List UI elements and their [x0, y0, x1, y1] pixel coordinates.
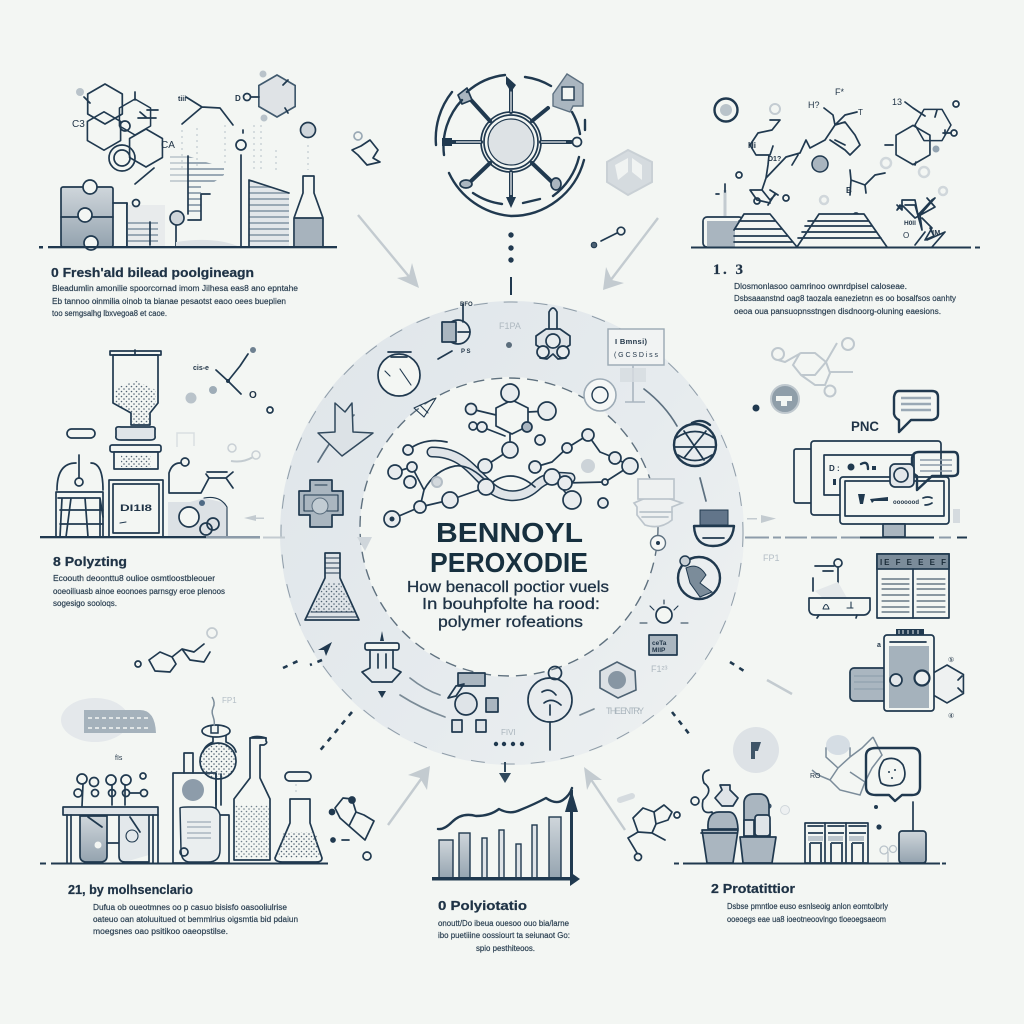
icon: display unit: DI1I8 — [120, 503, 152, 514]
icon: top molecule: cis-e — [193, 365, 209, 372]
dot — [752, 404, 760, 412]
speech bubble: lower — [890, 452, 958, 490]
icon: ring nodes — [76, 88, 135, 171]
ring icon: disc — [584, 379, 616, 411]
ring icon: molecule flower — [536, 308, 570, 359]
outer dashed ring — [281, 302, 743, 764]
ring label: faint caption: THE ENTRY — [606, 706, 644, 716]
icon: faint sprout — [880, 846, 896, 862]
ring icon: sign board — [608, 329, 664, 402]
step description: spio pesthiteoos. — [476, 944, 535, 953]
icon: cabinet with flask — [173, 753, 229, 863]
icon: P disc — [733, 727, 779, 773]
icon: rounded grid machine — [56, 455, 103, 537]
icon: trapezoid layers — [734, 214, 887, 247]
icon: tray with pin — [809, 559, 870, 618]
arrow: bottom-right to ring — [584, 767, 625, 830]
panel: middle-left step — [40, 347, 285, 608]
step description: ooeoiliuasb ainoe eoonoes parnsgy eroe plenoos — [53, 587, 225, 596]
faint capsule — [620, 796, 632, 800]
ring icon: sign board: (GCSDiss — [614, 352, 658, 359]
central ring panel — [280, 301, 744, 765]
label: RO — [810, 773, 821, 780]
left arrow — [244, 515, 264, 521]
wheel house badge — [553, 74, 583, 112]
panel: bottom-center chart — [432, 762, 580, 953]
icon: right hexagon: D — [235, 94, 241, 103]
molecule atoms — [384, 384, 638, 527]
icon: hexagon molecule — [84, 84, 162, 184]
ring icon: globe — [678, 556, 720, 599]
ring icon: chevron arrow — [318, 403, 373, 456]
ring icon: small spark — [414, 398, 436, 417]
icon: device panel: ④ — [948, 712, 954, 720]
icon: three frame rack — [805, 823, 868, 863]
icon: capsule — [67, 429, 95, 438]
step heading: 0 Fresh'ald bilead poolgineagn — [51, 265, 254, 280]
subtitle — [407, 579, 609, 631]
dashed connector: bottom-left — [318, 712, 352, 753]
dashed divider — [745, 536, 967, 538]
icon: small hex molecule bottom — [628, 805, 680, 860]
connector dots — [508, 232, 514, 295]
dot — [766, 803, 772, 809]
ring icon: bowl — [694, 510, 734, 546]
polymer ribbon — [432, 452, 570, 496]
ring label: faint code: FIVI — [501, 728, 516, 737]
atoms — [736, 172, 859, 219]
ring dot — [506, 342, 512, 348]
step description — [93, 903, 298, 936]
arrow: top right to ring — [603, 218, 658, 290]
step heading: 1. 3 — [713, 262, 743, 278]
icon: front monitor — [840, 477, 949, 537]
label: fIs — [115, 755, 123, 762]
icon: small branched chain: B — [846, 186, 852, 195]
faint atoms — [820, 158, 947, 204]
main title — [430, 517, 588, 578]
icon: lab bench — [63, 807, 158, 863]
wheel end caps — [442, 76, 582, 208]
ring dots — [494, 742, 524, 746]
icon: molecule chain: T — [858, 108, 863, 117]
icon: table sheet — [877, 554, 949, 618]
ring icon: leaf badge — [600, 662, 636, 698]
step description: oateuo oan atoluuitued ot bemmlrius oigsmtia bid pdaiun — [93, 915, 298, 924]
ring icon: sun box: MllP — [652, 647, 666, 654]
icon: reactor with bubbles — [168, 497, 228, 537]
icon: target disc — [714, 98, 780, 122]
wheel hub — [481, 112, 541, 172]
wheel arcs — [443, 75, 580, 204]
speech bubble: upper — [894, 391, 938, 432]
step description — [727, 902, 888, 924]
molecule labels: C3 — [72, 119, 85, 130]
icon: back monitor: D : — [829, 464, 840, 473]
step description: too semgsalhg lbxvegoa8 et caoe. — [52, 309, 167, 318]
icon: erlenmeyer flask — [275, 784, 322, 862]
step description: sogesigo sooloqs. — [53, 599, 117, 608]
step description: Eb tannoo oinmilia oinob ta bianae pesaotst eaoo oees bueplien — [52, 297, 286, 306]
baseline dot — [39, 246, 43, 248]
icon: molecule chain — [748, 87, 863, 205]
molecule bonds — [392, 393, 630, 519]
horizontal axis — [432, 872, 580, 886]
ring icon: striped round seal — [674, 421, 716, 466]
icon: back monitor — [794, 441, 941, 515]
icon: small hex molecule — [330, 797, 374, 860]
icon: badge disc — [771, 385, 799, 413]
icon: hourglass column — [110, 350, 161, 469]
ring icon: plus shield — [299, 480, 343, 527]
step heading: 0 Polyiotatio — [438, 898, 527, 913]
subtitle: In bouhpfolte ha rood: — [422, 596, 600, 613]
icon: device panel: ⑤ — [948, 656, 954, 664]
dashed connector: right — [730, 662, 744, 671]
subtitle: polymer rofeations — [438, 614, 583, 631]
main title: PEROXODIE — [430, 547, 588, 578]
ring icon: small ring — [650, 536, 666, 550]
speech bubble: leaf — [866, 748, 920, 801]
step heading: 8 Polyzting — [53, 554, 127, 569]
end dot — [942, 862, 946, 864]
panel: top-left step — [39, 70, 337, 318]
baseline — [683, 862, 940, 864]
step description: Dsbsaaanstnd oag8 taozala eanezietnn es oo bosalfsos oanhty — [734, 294, 956, 303]
grey atom — [932, 146, 940, 152]
icon: canister — [899, 802, 926, 863]
icon: molecule chain: H? — [808, 100, 820, 110]
step description — [53, 574, 225, 608]
icon: top molecule — [186, 347, 273, 413]
ring icon: sun box — [640, 600, 688, 655]
faint node — [953, 509, 960, 523]
blurred glow — [826, 735, 850, 755]
icon: branched chain — [178, 96, 233, 170]
icon: device panel: a — [877, 642, 881, 649]
ring small arrow — [318, 642, 332, 656]
molecule labels: CA — [161, 140, 175, 151]
panel: bottom-right step — [674, 727, 946, 924]
dashed connector: bottom-right — [672, 712, 690, 735]
icon: molecule chain: D1? — [768, 156, 781, 163]
subtitle: How benacoll poctior vuels — [407, 579, 609, 596]
step description: oeoa oua pansuopnsstngen disdnoorg-oluning eaesions. — [734, 307, 941, 316]
small molecule — [591, 227, 625, 248]
step heading: 2 Protatittior — [711, 881, 795, 896]
molecule labels — [72, 119, 175, 151]
baseline — [40, 536, 285, 538]
ring small triangle — [357, 537, 372, 551]
down arrow — [499, 762, 511, 783]
ring icon: pie chart marker: P S — [461, 349, 471, 355]
icon: display unit — [109, 480, 163, 537]
icon: double hexagon: 13 — [892, 97, 902, 107]
dashed connector: ring edge — [310, 660, 322, 665]
icon: lower molecule: H0ll — [904, 220, 916, 227]
central molecule — [384, 384, 638, 527]
panel: middle-right screens — [745, 338, 967, 720]
faint music glyph — [177, 433, 194, 447]
icon: potted plants — [691, 770, 776, 863]
ring icon: sign board: I Bmnsi) — [615, 337, 648, 346]
panel: top-right step — [691, 87, 980, 316]
chart bars — [439, 817, 561, 879]
icon: capsule — [285, 772, 311, 781]
icon: right hexagon — [235, 70, 295, 133]
vertical arrow axis — [565, 790, 578, 881]
faint label: FP1 — [763, 553, 780, 563]
dashed connector: left — [283, 660, 300, 668]
baseline — [48, 246, 337, 248]
step description: ibo puetiiine oossiourt ta seiunaot Go: — [438, 931, 570, 940]
icon: faint molecule — [772, 338, 854, 396]
icon: small branched chain — [846, 170, 885, 195]
icon: grey scroll tag — [61, 698, 156, 742]
ring icon: pie chart marker — [438, 302, 473, 359]
icon: tank — [703, 184, 743, 247]
step description: Dsbse pmntloe euso esnlseoig anlon eomtolbrly — [727, 902, 888, 911]
arrow: top left to ring — [358, 215, 419, 288]
ring icon: erlenmeyer flask — [305, 553, 359, 620]
baseline dot — [674, 862, 679, 864]
ring arc connectors — [318, 389, 706, 717]
arrow: bottom-left to ring — [388, 766, 430, 825]
baseline — [51, 862, 328, 864]
small faint molecule upper left — [352, 132, 380, 165]
ring band — [280, 301, 744, 765]
step description: onoutt/Do ibeua ouesoo ouo bia/larne — [438, 919, 570, 928]
ring icon: pin circle — [528, 666, 572, 750]
icon: branched chain: tiii — [178, 96, 186, 103]
icon: round flask top — [300, 122, 316, 138]
small molecule mid-left — [135, 628, 217, 672]
step description: Dufua ob oueotmnes oo p casuo bisisfo oasooliulrise — [93, 903, 288, 912]
step description: moegsnes oao psitikoo oaeopstilse. — [93, 927, 228, 936]
icon: plant molecules — [74, 773, 148, 806]
step description: Dlosmonlasoo oamrinoo ownrdpisel caloseae. — [734, 282, 907, 291]
dots — [874, 805, 882, 830]
wheel spokes — [451, 85, 571, 198]
step description: ooeoegs eae ua8 ioeotneoovlngo tloeoegsaeom — [727, 915, 886, 924]
label: PNC — [851, 419, 879, 434]
ghost hexagon — [607, 150, 652, 195]
icon: molecule chain: F* — [835, 87, 844, 97]
baseline dot — [975, 246, 980, 248]
icon: table sheet: IE F E E E F — [880, 558, 946, 567]
ring icon: round vessel — [378, 352, 420, 396]
inner dashed ring — [360, 378, 658, 676]
ring icon: lamp column — [362, 631, 401, 698]
icon: front monitor: ooooood — [893, 500, 919, 506]
icon: tanks and towers — [61, 125, 308, 250]
ring icon: pie chart marker: BFO — [460, 302, 473, 308]
icon: molecule chain: Hi — [748, 141, 756, 150]
icon: top molecule: O — [249, 390, 257, 401]
icon: bottle — [294, 176, 323, 247]
baseline dot — [40, 862, 46, 864]
step description: Bleadumlin amonilie spoorcornad imom Jilhesa eas8 ano epntahe — [52, 284, 299, 293]
icon: device panel — [850, 629, 963, 720]
panel: bottom-left step — [40, 697, 374, 936]
baseline — [691, 246, 971, 248]
icon: lower molecule — [897, 198, 945, 247]
faint ring — [780, 806, 790, 814]
grey disc atom — [812, 156, 828, 172]
right arrow — [747, 515, 776, 523]
step heading: 21, by molhsenclario — [68, 882, 193, 897]
ring icon: molecular squares — [448, 673, 498, 732]
icon: lower molecule: !M — [932, 230, 940, 237]
main title: BENNOYL — [436, 517, 583, 548]
icon: round flask — [200, 697, 236, 805]
ring label: faint tag: F1PA — [499, 321, 521, 331]
panel: top center wheel — [436, 74, 585, 216]
icon: double hexagon — [885, 97, 959, 165]
ring icon: house badge — [634, 479, 682, 527]
trend line — [438, 788, 572, 829]
icon: molecule branch — [169, 444, 260, 493]
step description — [52, 284, 299, 318]
faint code label: FP1 — [222, 696, 237, 705]
ring icon: sun box: ceTa — [652, 640, 667, 647]
step description — [438, 919, 570, 953]
faint arrow near device — [767, 680, 792, 694]
icon: lower molecule: O — [903, 231, 909, 240]
step description: Ecoouth deoonttu8 oulioe osmtloostbleouer — [53, 574, 215, 583]
icon: blurred molecule — [812, 737, 882, 795]
ring label: faint code: F1²³ — [651, 664, 668, 674]
step description — [734, 282, 956, 316]
icon: tall bottle — [234, 736, 270, 860]
